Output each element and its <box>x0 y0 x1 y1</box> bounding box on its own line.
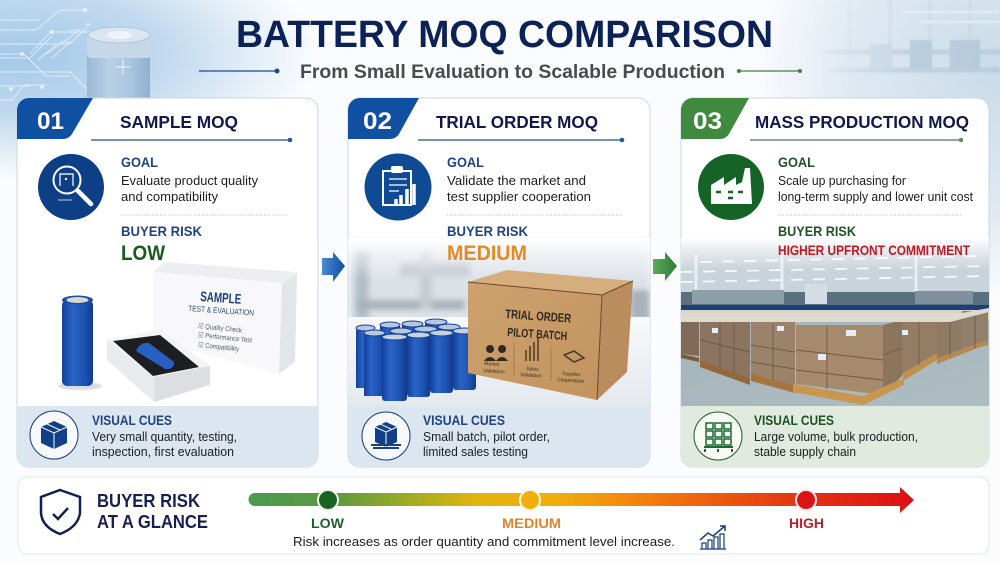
panel: buyer risk at a glance <box>18 477 989 554</box>
panel: trial order MOQ <box>348 98 650 467</box>
arrow: step 1 to 2 <box>322 252 345 282</box>
heading: TRIAL ORDER MOQ <box>436 112 598 132</box>
image: sample box and battery: ☑ Quality Check <box>198 322 243 335</box>
visual cues band <box>17 406 318 467</box>
label: medium: MEDIUM <box>502 515 561 531</box>
cardboard box: Market <box>484 361 500 368</box>
subtitle: From Small Evaluation to Scalable Production <box>300 61 725 83</box>
visual cues band: limited sales testing <box>423 445 528 459</box>
image: sample box and battery: ☑ Performance Test <box>198 331 252 345</box>
visual cues band: VISUAL CUES <box>423 413 505 428</box>
cardboard box: Validation <box>520 372 542 380</box>
badge 03 <box>681 98 749 139</box>
icon: parcel <box>30 411 78 459</box>
buyer risk low: BUYER RISK <box>121 223 202 239</box>
heading rule <box>750 138 963 142</box>
marker: medium <box>520 490 540 510</box>
badge 01 <box>17 98 93 139</box>
visual cues band: Large volume, bulk production, <box>754 430 918 444</box>
heading rule <box>91 138 292 142</box>
goal text: test supplier cooperation <box>447 190 591 204</box>
heading: AT A GLANCE <box>97 512 208 532</box>
image: sample box and battery: ☑ Compatibility <box>198 341 240 353</box>
heading: BUYER RISK <box>97 491 200 511</box>
cardboard box: PILOT BATCH <box>507 325 568 343</box>
pallet stacks <box>681 308 989 405</box>
marker: low <box>318 490 338 510</box>
badge 01: 01 <box>37 108 64 135</box>
goal text: long-term supply and lower unit cost <box>778 190 973 204</box>
heading rule <box>418 138 624 142</box>
visual cues band: Small batch, pilot order, <box>423 430 550 444</box>
panel: sample MOQ <box>17 98 318 467</box>
goal text: Validate the market and <box>447 174 586 188</box>
cardboard box: Supplier <box>562 371 581 378</box>
label: high: HIGH <box>789 515 824 531</box>
buyer risk medium: MEDIUM <box>447 242 527 265</box>
goal text: GOAL <box>121 154 158 170</box>
cardboard box: Sales <box>526 366 539 373</box>
buyer risk low <box>122 226 202 260</box>
goal text: Scale up purchasing for <box>778 174 906 188</box>
visual cues band <box>681 406 989 467</box>
icon: bulk pallet <box>694 412 742 460</box>
cardboard box: Validation <box>483 368 505 376</box>
image: trial order batch <box>348 238 650 407</box>
image: sample box and battery: SAMPLE <box>200 288 242 307</box>
heading: MASS PRODUCTION MOQ <box>755 112 969 132</box>
cardboard box <box>468 270 633 400</box>
title: BATTERY MOQ COMPARISON <box>236 14 773 56</box>
goal text: GOAL <box>778 154 815 170</box>
buyer risk medium: BUYER RISK <box>447 223 528 239</box>
badge 02 <box>348 98 419 139</box>
icon: shield <box>41 490 80 534</box>
visual cues band: VISUAL CUES <box>92 413 172 428</box>
buyer risk higher: HIGHER UPFRONT COMMITMENT <box>778 243 970 258</box>
buyer risk medium <box>448 226 528 260</box>
goal text <box>778 154 973 204</box>
risk gradient arrow <box>248 487 914 513</box>
buyer risk low: LOW <box>121 242 165 265</box>
badge 03: 03 <box>693 108 722 135</box>
goal text <box>447 154 591 204</box>
icon: clipboard <box>364 154 432 220</box>
icon: magnifier <box>38 154 104 220</box>
goal text: GOAL <box>447 154 484 170</box>
goal text <box>121 154 259 204</box>
icon: large battery background <box>87 27 151 100</box>
panel: mass production MOQ <box>681 98 989 467</box>
arrow: step 2 to 3 <box>653 252 677 281</box>
goal text: and compatibility <box>121 190 219 204</box>
background: circuit lines <box>0 8 90 100</box>
note: Risk increases as order quantity and commitment level increase. <box>293 534 675 549</box>
marker: high <box>796 490 816 510</box>
badge 02: 02 <box>363 108 392 135</box>
visual cues band: inspection, first evaluation <box>92 445 234 459</box>
image: warehouse pallets <box>681 238 989 407</box>
visual cues band: Very small quantity, testing, <box>92 430 237 444</box>
heading <box>97 491 208 532</box>
image: sample box and battery <box>58 262 297 402</box>
icon: growth chart <box>700 526 726 549</box>
heading: SAMPLE MOQ <box>120 112 238 132</box>
label: low: LOW <box>311 515 345 531</box>
icon: pallet parcel <box>362 412 410 460</box>
visual cues band: stable supply chain <box>754 445 856 459</box>
cardboard box: Cooperation <box>557 377 585 385</box>
buyer risk higher <box>778 226 970 255</box>
cardboard box: TRIAL ORDER <box>505 307 572 326</box>
goal text: Evaluate product quality <box>121 174 259 188</box>
visual cues band: VISUAL CUES <box>754 413 834 428</box>
icon: factory <box>698 154 764 220</box>
image: sample box and battery: TEST & EVALUATION <box>188 304 255 318</box>
background: factory scene top right <box>820 0 1000 70</box>
batteries <box>356 319 476 401</box>
visual cues band <box>348 406 650 467</box>
buyer risk higher: BUYER RISK <box>778 223 856 239</box>
